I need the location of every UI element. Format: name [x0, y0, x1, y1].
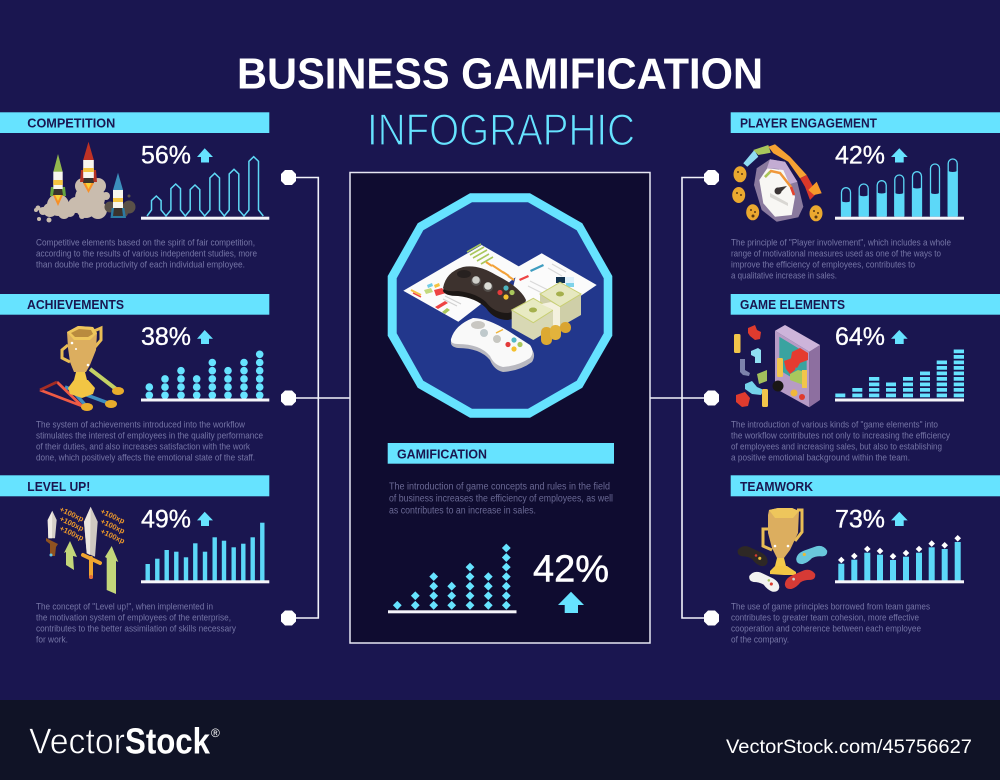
- game elements header: [731, 294, 1000, 315]
- icon: white controller: [451, 318, 534, 372]
- panel: player engagement: [731, 112, 1000, 282]
- gamification header: [388, 443, 614, 464]
- panel: central gamification: [350, 172, 650, 643]
- icon: swords and arrows: +100xp: [58, 524, 86, 543]
- panel: level up: [0, 475, 269, 646]
- competition header: COMPETITION: [27, 116, 115, 130]
- chart: outlined bars: [141, 157, 269, 220]
- teamwork header: TEAMWORK: [740, 479, 814, 494]
- achievements text: stimulates the interest of employees in the quality performance: [36, 431, 263, 442]
- icon: up arrow: [197, 148, 213, 162]
- chart: bars with diamonds: [835, 535, 964, 583]
- icon: dodecagon badge with controllers: [388, 193, 612, 418]
- percentage: 73%: [835, 505, 885, 533]
- icon: up arrow: [197, 512, 213, 526]
- player engagement header: PLAYER ENGAGEMENT: [740, 116, 877, 130]
- title: BUSINESS GAMIFICATION: [237, 50, 763, 98]
- teamwork text: of the company.: [731, 634, 789, 646]
- icon: up arrow: [891, 512, 908, 526]
- game elements header: GAME ELEMENTS: [740, 297, 845, 312]
- panel: achievements: [0, 294, 269, 463]
- percentage: 49%: [141, 505, 191, 533]
- subtitle: INFOGRAPHIC: [367, 106, 635, 155]
- level up text: contributes to the better assimilation of skills necessary: [36, 624, 236, 634]
- icon: trophy and controllers: [736, 508, 828, 593]
- gamification text: [389, 481, 613, 516]
- teamwork text: contributes to greater team cohesion, more effective: [731, 612, 919, 624]
- percentage: 56%: [141, 141, 191, 169]
- gamification text: as contributes to an increase in sales.: [389, 505, 536, 516]
- level up text: [36, 602, 236, 646]
- achievements text: of their duties, and also increases satisfaction with the work: [36, 441, 250, 452]
- chart: slim bars: [141, 523, 269, 583]
- icon: swords and arrows: +100xp: [99, 507, 127, 526]
- competition text: Competitive elements based on the spirit of fair competition,: [36, 238, 255, 249]
- icon: up arrow: [891, 330, 908, 344]
- player engagement text: range of motivational measures used as one of the ways to: [731, 249, 941, 260]
- chart: dot columns: [141, 350, 269, 402]
- icon: up arrow: [558, 592, 584, 613]
- percentage: 38%: [141, 323, 191, 351]
- icon: gauge with emoji: [732, 144, 822, 222]
- panel: competition: [0, 112, 269, 271]
- player engagement header: [731, 112, 1000, 133]
- player engagement text: The principle of "Player involvement", which includes a whole: [731, 238, 951, 249]
- level up text: for work.: [36, 634, 68, 646]
- game elements text: The introduction of various kinds of "game elements" into: [731, 420, 938, 431]
- achievements header: [0, 294, 269, 315]
- achievements text: [36, 420, 263, 463]
- game elements text: a positive emotional background within the team.: [731, 452, 910, 463]
- game elements text: [731, 420, 950, 463]
- registered mark: ®: [211, 726, 220, 740]
- panel: game elements: [731, 294, 1000, 463]
- icon: up arrow: [197, 330, 213, 344]
- game elements text: of employees and increasing sales, but also to establishing: [731, 441, 942, 452]
- teamwork text: cooperation and coherence between each employee: [731, 624, 921, 634]
- achievements text: done, which positively affects the emotional state of the staff.: [36, 452, 255, 463]
- icon: swords and arrows: [46, 505, 127, 594]
- game elements text: the workflow contributes not only to increasing the efficiency: [731, 431, 950, 442]
- chart: capsule bars: [835, 159, 964, 220]
- footer band: [0, 700, 1000, 780]
- level up text: The concept of "Level up!", when implemented in: [36, 602, 213, 612]
- panel: teamwork: [731, 475, 1000, 646]
- gamification text: of business increases the efficiency of employees, as well: [389, 493, 613, 504]
- footer url: VectorStock.com/45756627: [726, 736, 972, 758]
- icon: money stacks: [512, 282, 581, 345]
- chart: gamification diamonds: [388, 544, 516, 613]
- competition header: [0, 112, 269, 133]
- player engagement text: a qualitative increase in sales.: [731, 271, 837, 282]
- teamwork text: The use of game principles borrowed from team games: [731, 602, 930, 612]
- percentage: 64%: [835, 323, 885, 351]
- icon: rockets: [34, 142, 136, 222]
- connector lines and nodes: [281, 170, 719, 626]
- level up header: [0, 475, 269, 496]
- icon: black controller: [443, 266, 526, 320]
- footer logo: Stock: [125, 720, 211, 762]
- level up header: LEVEL UP!: [27, 479, 90, 494]
- icon: swords and arrows: +100xp: [58, 514, 86, 533]
- icon: arcade machine and blocks: [734, 325, 820, 407]
- icon: swords and arrows: +100xp: [58, 505, 86, 524]
- teamwork text: [731, 602, 930, 646]
- achievements text: The system of achievements introduced into the workflow: [36, 420, 245, 431]
- player engagement text: [731, 238, 951, 282]
- competition text: [36, 238, 257, 271]
- footer logo: Vector: [29, 720, 125, 762]
- gamification text: The introduction of game concepts and rules in the field: [389, 481, 610, 492]
- level up text: the motivation system of employees of the enterprise,: [36, 612, 231, 624]
- icon: trophy with medals: [40, 326, 124, 411]
- icon: up arrow: [891, 148, 908, 162]
- competition text: according to the results of various independent studies, more: [36, 249, 257, 260]
- teamwork header: [731, 475, 1000, 496]
- icon: swords and arrows: +100xp: [99, 517, 127, 536]
- icon: swords and arrows: +100xp: [99, 527, 127, 546]
- competition text: than double the productivity of each individual employee.: [36, 260, 245, 271]
- achievements header: ACHIEVEMENTS: [27, 297, 124, 312]
- gamification header: GAMIFICATION: [397, 446, 487, 461]
- chart: segmented bars: [835, 351, 964, 402]
- percentage: 42%: [835, 141, 885, 169]
- player engagement text: improve the efficiency of employees, contributes to: [731, 260, 915, 271]
- gamification percentage: 42%: [533, 549, 609, 591]
